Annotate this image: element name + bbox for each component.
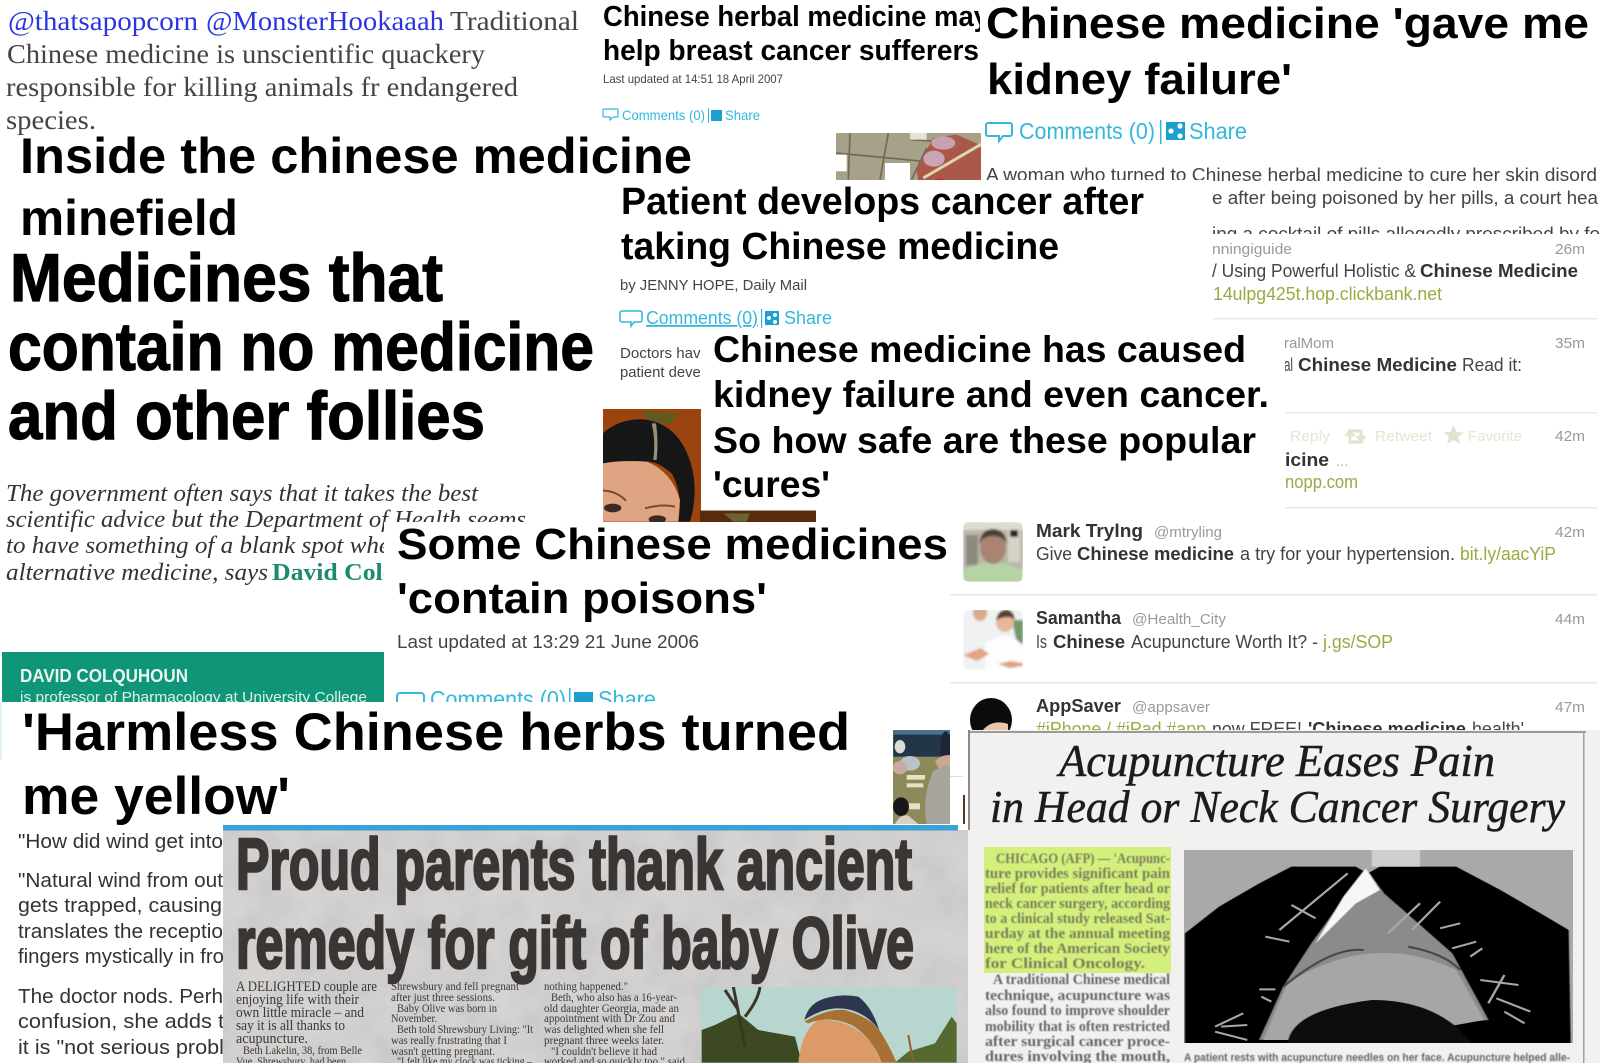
article text: mobility that is often restricted	[985, 1019, 1171, 1035]
avatar: Mark	[963, 522, 1023, 582]
headline: gave me kidney failure: kidney failure'	[987, 55, 1292, 104]
article body: confusion, she adds t	[18, 1011, 224, 1033]
panel: Chinese medicine has caused kidney failure: Chinese medicine has caused	[713, 329, 1246, 370]
tweet: AppSaver: 'Chinese medicine	[1308, 719, 1466, 739]
tweet: Mark Trylng: a try for your hypertension.	[1240, 544, 1455, 564]
article body lines: A woman who turned to Chinese herbal medicine to cure her skin disord	[986, 165, 1597, 185]
panel: tweet about quackery: species.	[6, 105, 96, 135]
tweet: actions reply retweet favorite: Retweet	[1375, 428, 1433, 445]
article column 2: wasn't getting pregnant.	[391, 1044, 495, 1058]
headline: proud parents: remedy for gift of baby Olive	[236, 904, 914, 984]
tweet: Using Powerful Holistic: 26m	[1555, 241, 1585, 258]
article column 2: after just three sessions.	[391, 990, 495, 1004]
headline: Inside the chinese medicine minefield: minefield	[20, 190, 238, 246]
highlighted text block	[984, 847, 1171, 973]
headline: proud parents: Proud parents thank ancient	[236, 825, 912, 905]
comments and share links: Share	[784, 308, 832, 328]
headline: harmless herbs: me yellow'	[22, 767, 290, 826]
callout: David Colquhoun author box: DAVID COLQUHOUN	[20, 666, 188, 686]
article body lines	[986, 165, 1600, 244]
panel: Some Chinese medicines contain poisons: Some Chinese medicines	[397, 520, 948, 569]
panel: herbal medicine may help breast cancer: Chinese herbal medicine may	[603, 1, 989, 33]
panel: twitter search results	[950, 234, 1600, 742]
article column 2: Shrewsbury and fell pregnant	[391, 979, 520, 993]
article column 1: acupuncture.	[236, 1031, 308, 1047]
article body: The doctor nods. Perh	[18, 986, 223, 1008]
panel: tweet about quackery: Chinese medicine is unscientific quackery	[7, 39, 486, 69]
article body lines: ing a cocktail of pills allegedly prescribed by fo	[1212, 224, 1600, 244]
article column 1: enjoying life with their	[236, 992, 359, 1008]
tweet: Using Powerful Holistic: Chinese Medicine	[1420, 261, 1578, 281]
article column 3: was delighted when she fell	[544, 1022, 665, 1036]
article text	[985, 972, 1171, 1063]
tweet: actions reply retweet favorite: ...	[1336, 453, 1349, 470]
tweet: AppSaver: now FREE!	[1212, 719, 1302, 739]
headline: gave me kidney failure: Chinese medicine 'gave me	[986, 0, 1589, 48]
comments and share links: Share	[1189, 118, 1247, 144]
panel: Some Chinese medicines contain poisons: Last updated at 13:29 21 June 2006	[397, 632, 699, 652]
headline: Medicines that contain no medicine: and other follies	[8, 378, 485, 454]
tweet: actions reply retweet favorite: 42m	[1555, 428, 1585, 445]
comments and share links, clipped: Share	[598, 686, 656, 712]
highlighted text block: neck cancer surgery, according	[985, 896, 1170, 912]
highlighted text block: for Clinical Oncology.	[985, 956, 1145, 972]
article body: translates the receptio	[18, 921, 223, 943]
tweet: naturalMom: al	[1284, 355, 1293, 375]
article column 1: own little miracle – and	[236, 1005, 365, 1021]
highlighted text block: here of the American Society	[985, 941, 1170, 957]
avatar: Samantha	[963, 605, 1023, 670]
tweet: naturalMom	[1284, 335, 1597, 414]
text block: italic standfirst: alternative medicine, says	[6, 560, 268, 586]
article body	[18, 831, 224, 1059]
headline: Medicines that contain no medicine	[8, 240, 594, 454]
highlighted text block: ture provides significant pain	[985, 866, 1171, 882]
tweet: naturalMom: ralMom	[1284, 335, 1334, 352]
tweet: AppSaver: #iPhone / #iPad #app	[1036, 719, 1206, 739]
article column 2: November.	[391, 1011, 437, 1025]
tweet: Samantha: @Health_City	[1132, 611, 1227, 628]
headline: proud parents	[236, 825, 914, 984]
article column 1	[236, 979, 377, 1063]
image: woman with dark hair	[603, 409, 817, 523]
tweet: Using Powerful Holistic: / Using Powerful Holistic &	[1212, 261, 1416, 281]
callout: David Colquhoun author box	[2, 652, 384, 706]
highlighted text block: CHICAGO (AFP) — 'Acupunc-	[996, 851, 1170, 867]
headline: acupuncture eases pain: in Head or Neck Cancer Surgery	[990, 782, 1565, 832]
text block: italic standfirst: to have something of a blank spot where	[6, 533, 410, 559]
headline: Inside the chinese medicine minefield: Inside the chinese medicine	[20, 128, 692, 184]
article text: A traditional Chinese medical	[993, 972, 1170, 988]
article column 1: say it is all thanks to	[236, 1018, 345, 1034]
panel: Chinese medicine has caused kidney failure: kidney failure and even cancer.	[713, 374, 1269, 415]
article body: "How did wind get into	[18, 831, 223, 853]
image: black and white face with acupuncture needles	[1184, 850, 1573, 1043]
headline: patient develops cancer: Patient develops cancer after	[621, 181, 1144, 223]
tweet: Mark Trylng: @mtryling	[1154, 524, 1222, 541]
article column 2: Beth told Shrewsbury Living: "It	[397, 1022, 534, 1036]
panel: herbal medicine may help breast cancer: Last updated at 14:51 18 April 2007	[603, 72, 783, 86]
tweet: Samantha: Acupuncture Worth It? -	[1131, 632, 1318, 652]
tweet: Samantha: Samantha	[1036, 608, 1122, 628]
panel: Patient develops cancer	[602, 180, 1212, 409]
image: hand holding acupuncture pen	[833, 133, 983, 181]
tweet: actions reply retweet favorite	[1285, 425, 1597, 508]
tweet: Mark Trylng: Chinese medicine	[1077, 544, 1234, 564]
article body: fingers mystically in fro	[18, 946, 224, 968]
tweet: actions reply retweet favorite: Reply	[1290, 428, 1331, 445]
panel: Patient develops cancer: patient develops	[620, 364, 728, 381]
comments and share links: Comments (0)	[646, 308, 758, 328]
panel: headline Chinese medicine gave me kidney failure	[981, 0, 1600, 244]
tweet: AppSaver: health'	[1472, 719, 1524, 739]
article column 3: old daughter Georgia, made an	[544, 1001, 679, 1015]
panel: Chinese medicine has caused kidney failure: 'cures'	[713, 464, 830, 505]
article column 3: nothing happened."	[544, 979, 628, 993]
tweet: AppSaver	[970, 696, 1585, 742]
tweet: Mark Trylng: Mark Trylng	[1036, 521, 1143, 541]
article column 3: Beth, who also has a 16-year-	[551, 990, 677, 1004]
avatar: AppSaver	[970, 698, 1012, 742]
article body: it is "not serious probl	[18, 1037, 224, 1059]
panel: herbal medicine may help breast cancer: Share	[725, 107, 760, 123]
tweet: Mark Trylng: bit.ly/aacYiP	[1460, 544, 1556, 564]
image: woman with sunglasses outdoors	[701, 987, 957, 1063]
highlighted text block: relief for patients after head or	[985, 881, 1170, 897]
headline: patient develops cancer: taking Chinese medicine	[621, 226, 1059, 268]
text block: italic standfirst: The government often says that it takes the best	[6, 481, 479, 507]
panel: Patient develops cancer: Doctors have	[620, 345, 709, 362]
comments and share links: Comments (0)	[1019, 118, 1155, 144]
headline: Medicines that contain no medicine: Medicines that	[10, 240, 443, 316]
panel: newspaper clipping Acupuncture Eases Pain	[968, 730, 1600, 1063]
comments and share links, clipped: Comments (0)	[430, 686, 566, 712]
text block: italic standfirst: scientific advice but the Department of Health seems	[6, 507, 526, 533]
comments and share links	[986, 118, 1247, 144]
tweet: Mark Trylng: 42m	[1555, 524, 1585, 541]
text block: italic standfirst: David Colq	[272, 560, 398, 586]
comments and share links	[620, 308, 832, 328]
panel: tweet about quackery: @MonsterHookaaah	[206, 6, 445, 36]
article text: also found to improve shoulder	[985, 1003, 1170, 1019]
panel: tweet about quackery: @thatsapopcorn	[8, 6, 199, 36]
tweet: Samantha: Is	[1036, 632, 1047, 652]
panel: Some Chinese medicines contain poisons	[384, 520, 950, 712]
headline: Inside the chinese medicine minefield	[20, 128, 692, 246]
tweet: Mark Trylng	[950, 521, 1597, 596]
panel: Some Chinese medicines contain poisons: 'contain poisons'	[397, 574, 767, 623]
panel: tweet about quackery: Traditional	[450, 6, 579, 36]
tweet: Samantha: j.gs/SOP	[1322, 632, 1393, 652]
article body: gets trapped, causing	[18, 895, 222, 917]
article text: after surgical cancer proce-	[985, 1034, 1170, 1050]
article column 1: Beth Lakelin, 38, from Belle	[243, 1043, 362, 1057]
panel: herbal medicine may help breast cancer	[603, 1, 989, 123]
article column 2: was really frustrating that I	[391, 1033, 507, 1047]
tweet: actions reply retweet favorite: nopp.com	[1285, 472, 1358, 492]
article column 3: appointment with Dr Zou and	[544, 1011, 675, 1025]
panel: Chinese medicine has caused kidney failure	[701, 329, 1285, 510]
panel: Patient develops cancer: by JENNY HOPE, Daily Mail	[620, 277, 807, 294]
headline: harmless herbs: 'Harmless Chinese herbs turned	[22, 703, 850, 762]
tweet: Using Powerful Holistic: 14ulpg425t.hop.clickbank.net	[1213, 284, 1442, 304]
panel: newspaper clipping Proud parents	[223, 825, 973, 1063]
panel: Chinese medicine has caused kidney failure: So how safe are these popular	[713, 420, 1256, 461]
tweet: Mark Trylng: Give	[1036, 544, 1072, 564]
tweet: Samantha: 44m	[1555, 611, 1585, 628]
tweet: naturalMom: Read it:	[1462, 355, 1522, 375]
article column 3: pregnant three weeks later.	[544, 1033, 664, 1047]
image: crowd photo with woman	[893, 730, 951, 824]
tweet: actions reply retweet favorite: icine	[1285, 450, 1329, 470]
article column 3	[544, 979, 685, 1063]
panel: herbal medicine may help breast cancer: help breast cancer sufferers	[603, 35, 979, 67]
tweet: AppSaver: @appsaver	[1132, 699, 1210, 716]
article column 2	[391, 979, 534, 1063]
fragment: column edge beside crowd photo	[950, 776, 965, 824]
panel: tweet about quackery	[6, 6, 579, 135]
panel: Harmless Chinese herbs turned me yellow	[0, 702, 965, 1059]
tweet: Samantha	[950, 605, 1597, 684]
callout: David Colquhoun author box: is professor of Pharmacology at University College	[20, 689, 367, 706]
headline: acupuncture eases pain	[990, 736, 1565, 832]
text block: italic standfirst	[6, 481, 526, 586]
tweet: Samantha: Chinese	[1053, 632, 1125, 652]
comments and share links, clipped	[397, 686, 656, 712]
tweet: AppSaver: 47m	[1555, 699, 1585, 716]
highlighted text block: to a clinical study released Sat-	[985, 911, 1170, 927]
article text: technique, acupuncture was	[985, 988, 1170, 1004]
headline: patient develops cancer	[621, 181, 1144, 268]
headline: Medicines that contain no medicine: contain no medicine	[8, 309, 594, 385]
article column 2: Baby Olive was born in	[397, 1001, 497, 1015]
tweet: Using Powerful Holistic: nningiguide	[1212, 241, 1292, 258]
tweet: naturalMom: Chinese Medicine	[1298, 355, 1457, 375]
article column 3: "I couldn't believe it had	[551, 1044, 657, 1058]
tweet: naturalMom: 35m	[1555, 335, 1585, 352]
article column 1: A DELIGHTED couple are	[236, 979, 377, 995]
tweet: Using Powerful Holistic	[1212, 241, 1597, 320]
article body: "Natural wind from out	[18, 870, 223, 892]
tweet: actions reply retweet favorite: Favorite	[1468, 428, 1522, 445]
highlighted text block: urday at the annual meeting	[985, 926, 1171, 942]
tweet: AppSaver: AppSaver	[1036, 696, 1121, 716]
article body lines: e after being poisoned by her pills, a court hea	[1212, 188, 1599, 208]
headline: harmless herbs	[22, 703, 850, 826]
headline: gave me kidney failure	[986, 0, 1589, 104]
panel: tweet about quackery: responsible for killing animals fr endangered	[6, 72, 519, 102]
panel: herbal medicine may help breast cancer: Comments (0)	[622, 107, 705, 123]
headline: acupuncture eases pain: Acupuncture Eases Pain	[1056, 736, 1495, 786]
